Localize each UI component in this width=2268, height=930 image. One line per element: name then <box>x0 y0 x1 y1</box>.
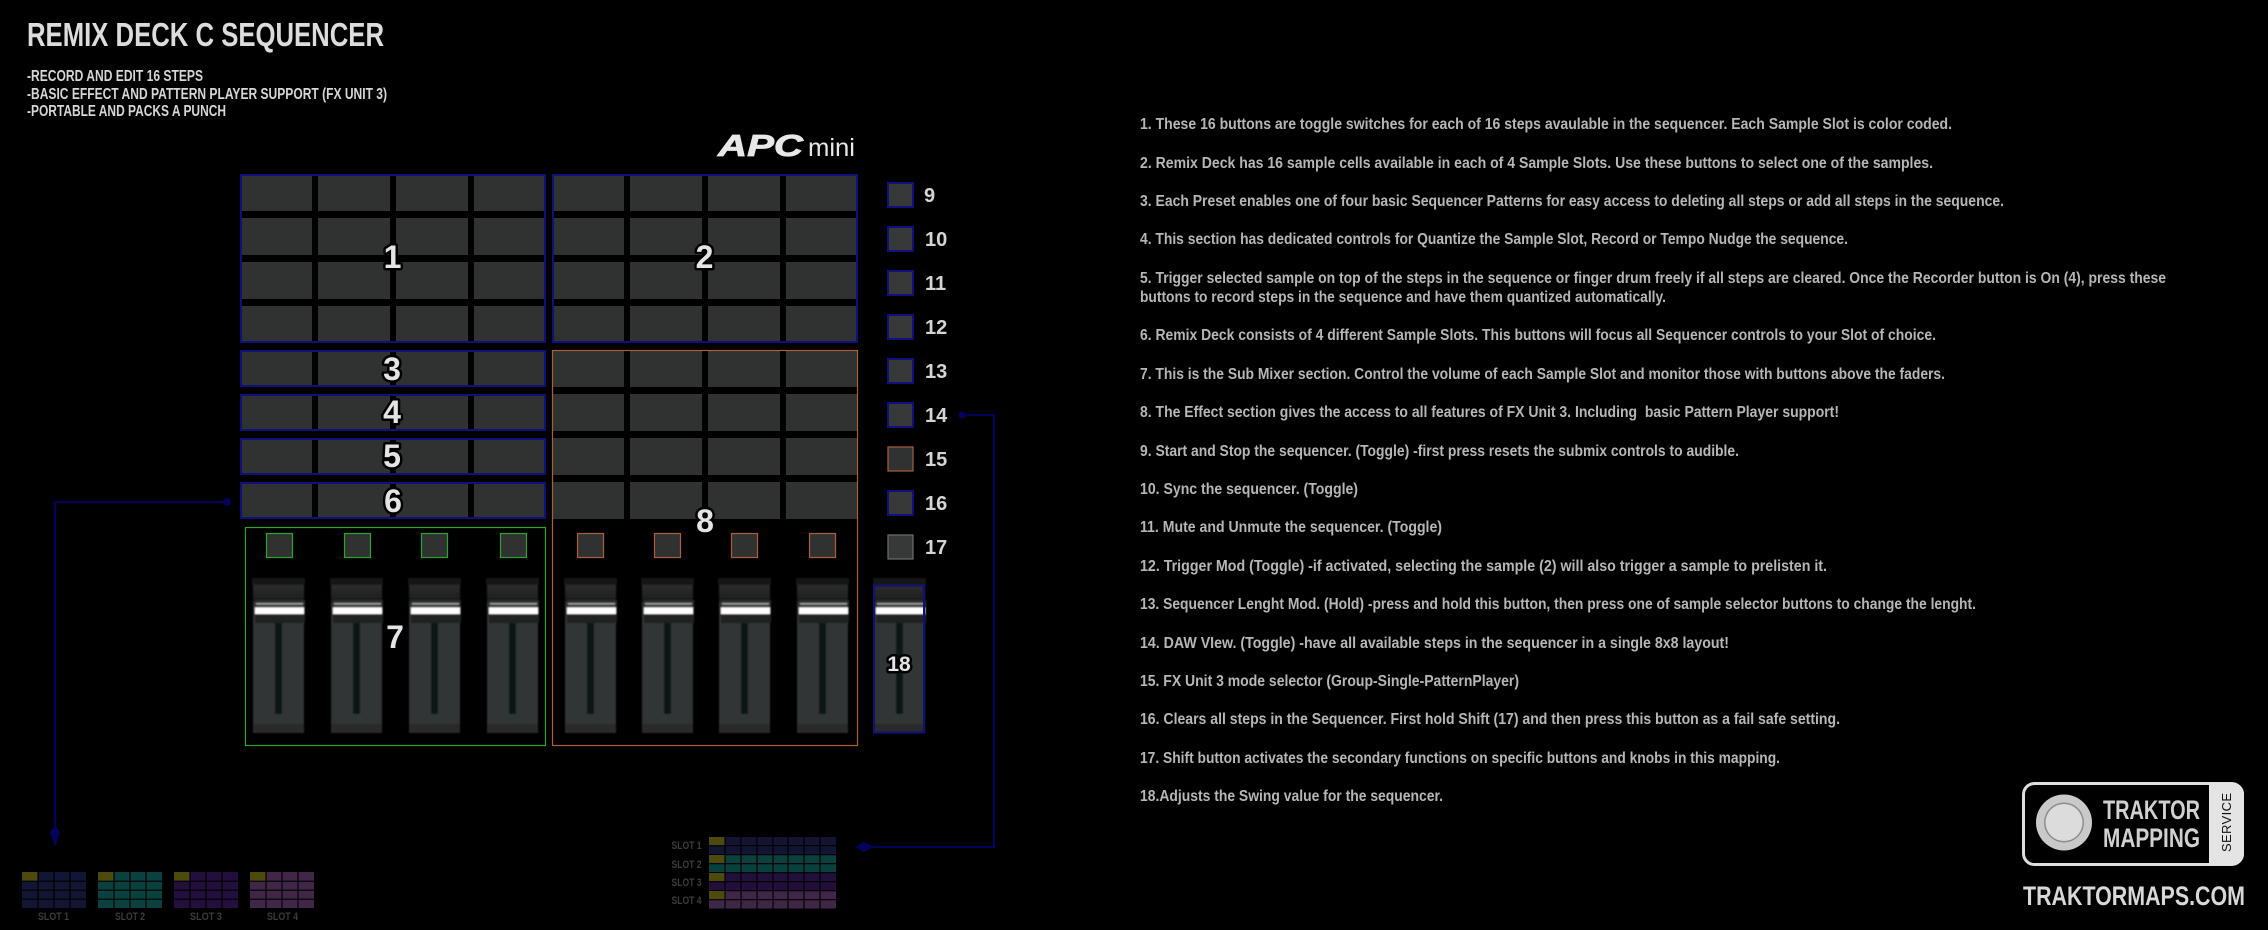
side button numbers: 9 <box>924 185 935 207</box>
connector: 14 to DAW view <box>855 412 994 852</box>
descriptions text block: 1. These 16 buttons are toggle switches for each of 16 steps avaulable in the sequencer. Each Sample Slot is color coded. <box>1140 116 1952 133</box>
panel 6: slot focus <box>240 482 546 519</box>
side button numbers: 14 <box>925 405 948 427</box>
slot legend: 8x8 DAW view: SLOT 1 <box>672 840 702 852</box>
descriptions text block: 5. Trigger selected sample on top of the steps in the sequence or finger drum freely if all steps are cleared. Once the Recorder button is On (4), press these <box>1140 270 2166 287</box>
descriptions text block: 13. Sequencer Lenght Mod. (Hold) -press and hold this button, then press one of sample selector buttons to change the lenght. <box>1140 596 1976 613</box>
slot legend: 4x4 slots: SLOT 3 <box>190 911 222 923</box>
Traktor Mapping Service badge: SERVICE <box>2219 793 2234 852</box>
panel 5: sample triggers <box>240 438 546 475</box>
Traktor Mapping Service badge <box>2024 783 2244 865</box>
feature list: -RECORD AND EDIT 16 STEPS <box>27 68 203 85</box>
connector: 6 to slot overview <box>50 498 231 847</box>
descriptions text block: 4. This section has dedicated controls for Quantize the Sample Slot, Record or Tempo Nudge the sequence. <box>1140 231 1848 248</box>
section numbers: 18 <box>887 653 911 676</box>
descriptions text block: 8. The Effect section gives the access to all features of FX Unit 3. Including basic Pattern Player support! <box>1140 404 1839 421</box>
side button numbers: 11 <box>925 273 946 295</box>
descriptions text block: buttons to record steps in the sequence and have them quantized automatically. <box>1140 289 1666 306</box>
side button numbers <box>924 185 948 559</box>
Traktor Mapping Service badge: MAPPING <box>2103 823 2200 853</box>
section numbers: 6 <box>384 483 402 519</box>
title: REMIX DECK C SEQUENCER <box>27 16 384 53</box>
descriptions text block: 6. Remix Deck consists of 4 different Sample Slots. This buttons will focus all Sequencer controls to your Slot of choice. <box>1140 327 1936 344</box>
descriptions text block: 12. Trigger Mod (Toggle) -if activated, selecting the sample (2) will also trigger a sample to prelisten it. <box>1140 558 1827 575</box>
descriptions text block: 17. Shift button activates the secondary functions on specific buttons and knobs in this mapping. <box>1140 750 1780 767</box>
feature list: -PORTABLE AND PACKS A PUNCH <box>27 103 226 120</box>
side button numbers: 13 <box>925 361 947 383</box>
slot legend: 4x4 slots: SLOT 1 <box>38 911 69 923</box>
side button numbers: 17 <box>925 537 947 559</box>
slot legend: 8x8 DAW view <box>672 837 836 909</box>
slot legend: 4x4 slots <box>22 872 314 923</box>
panel 2: sample selectors <box>552 174 858 343</box>
slot legend: 8x8 DAW view: SLOT 3 <box>672 877 702 889</box>
APC mini logo: APC <box>717 128 804 163</box>
slot legend: 4x4 slots: SLOT 4 <box>267 911 299 923</box>
descriptions text block: 9. Start and Stop the sequencer. (Toggle) -first press resets the submix controls to audible. <box>1140 443 1739 460</box>
panel 1: step buttons <box>240 174 546 343</box>
fader 18: swing <box>873 578 926 733</box>
descriptions text block: 3. Each Preset enables one of four basic Sequencer Patterns for easy access to deleting all steps or add all steps in the sequence. <box>1140 193 2004 210</box>
slot legend: 8x8 DAW view: SLOT 4 <box>672 895 702 907</box>
section numbers: 4 <box>383 394 401 430</box>
descriptions text block: 18.Adjusts the Swing value for the sequencer. <box>1140 788 1443 805</box>
APC mini logo: mini <box>808 134 855 162</box>
section numbers: 7 <box>386 619 404 655</box>
feature list <box>27 68 387 120</box>
descriptions text block <box>1140 116 2166 805</box>
descriptions text block: 10. Sync the sequencer. (Toggle) <box>1140 481 1358 498</box>
descriptions text block: 15. FX Unit 3 mode selector (Group-Single-PatternPlayer) <box>1140 673 1519 690</box>
descriptions text block: 7. This is the Sub Mixer section. Control the volume of each Sample Slot and monitor those with buttons above the faders. <box>1140 366 1945 383</box>
panel 8: effect section <box>552 350 858 746</box>
section numbers: 2 <box>696 239 713 275</box>
descriptions text block: 11. Mute and Unmute the sequencer. (Toggle) <box>1140 519 1442 536</box>
section numbers: 1 <box>384 239 401 275</box>
descriptions text block: 2. Remix Deck has 16 sample cells available in each of 4 Sample Slots. Use these buttons to select one of the samples. <box>1140 155 1933 172</box>
feature list: -BASIC EFFECT AND PATTERN PLAYER SUPPORT (FX UNIT 3) <box>27 86 387 103</box>
panel 7: sub mixer <box>246 528 546 746</box>
Traktor Mapping Service badge: TRAKTOR <box>2103 795 2200 825</box>
descriptions text block: 16. Clears all steps in the Sequencer. First hold Shift (17) and then press this button as a fail safe setting. <box>1140 711 1840 728</box>
side button numbers: 16 <box>925 493 947 515</box>
slot legend: 4x4 slots: SLOT 2 <box>115 911 145 923</box>
section numbers: 5 <box>383 438 401 474</box>
side button numbers: 10 <box>925 229 947 251</box>
APC mini logo <box>717 128 855 163</box>
panel 3: presets <box>240 350 546 387</box>
section numbers <box>383 239 911 676</box>
side button numbers: 12 <box>925 317 947 339</box>
panel 4: quantize record nudge <box>240 394 546 431</box>
section numbers: 8 <box>696 503 714 539</box>
slot legend: 8x8 DAW view: SLOT 2 <box>672 859 702 871</box>
descriptions text block: 14. DAW VIew. (Toggle) -have all available steps in the sequencer in a single 8x8 layout! <box>1140 635 1729 652</box>
side button numbers: 15 <box>925 449 947 471</box>
side buttons 9 to 17 <box>888 183 913 559</box>
section numbers: 3 <box>383 351 401 387</box>
